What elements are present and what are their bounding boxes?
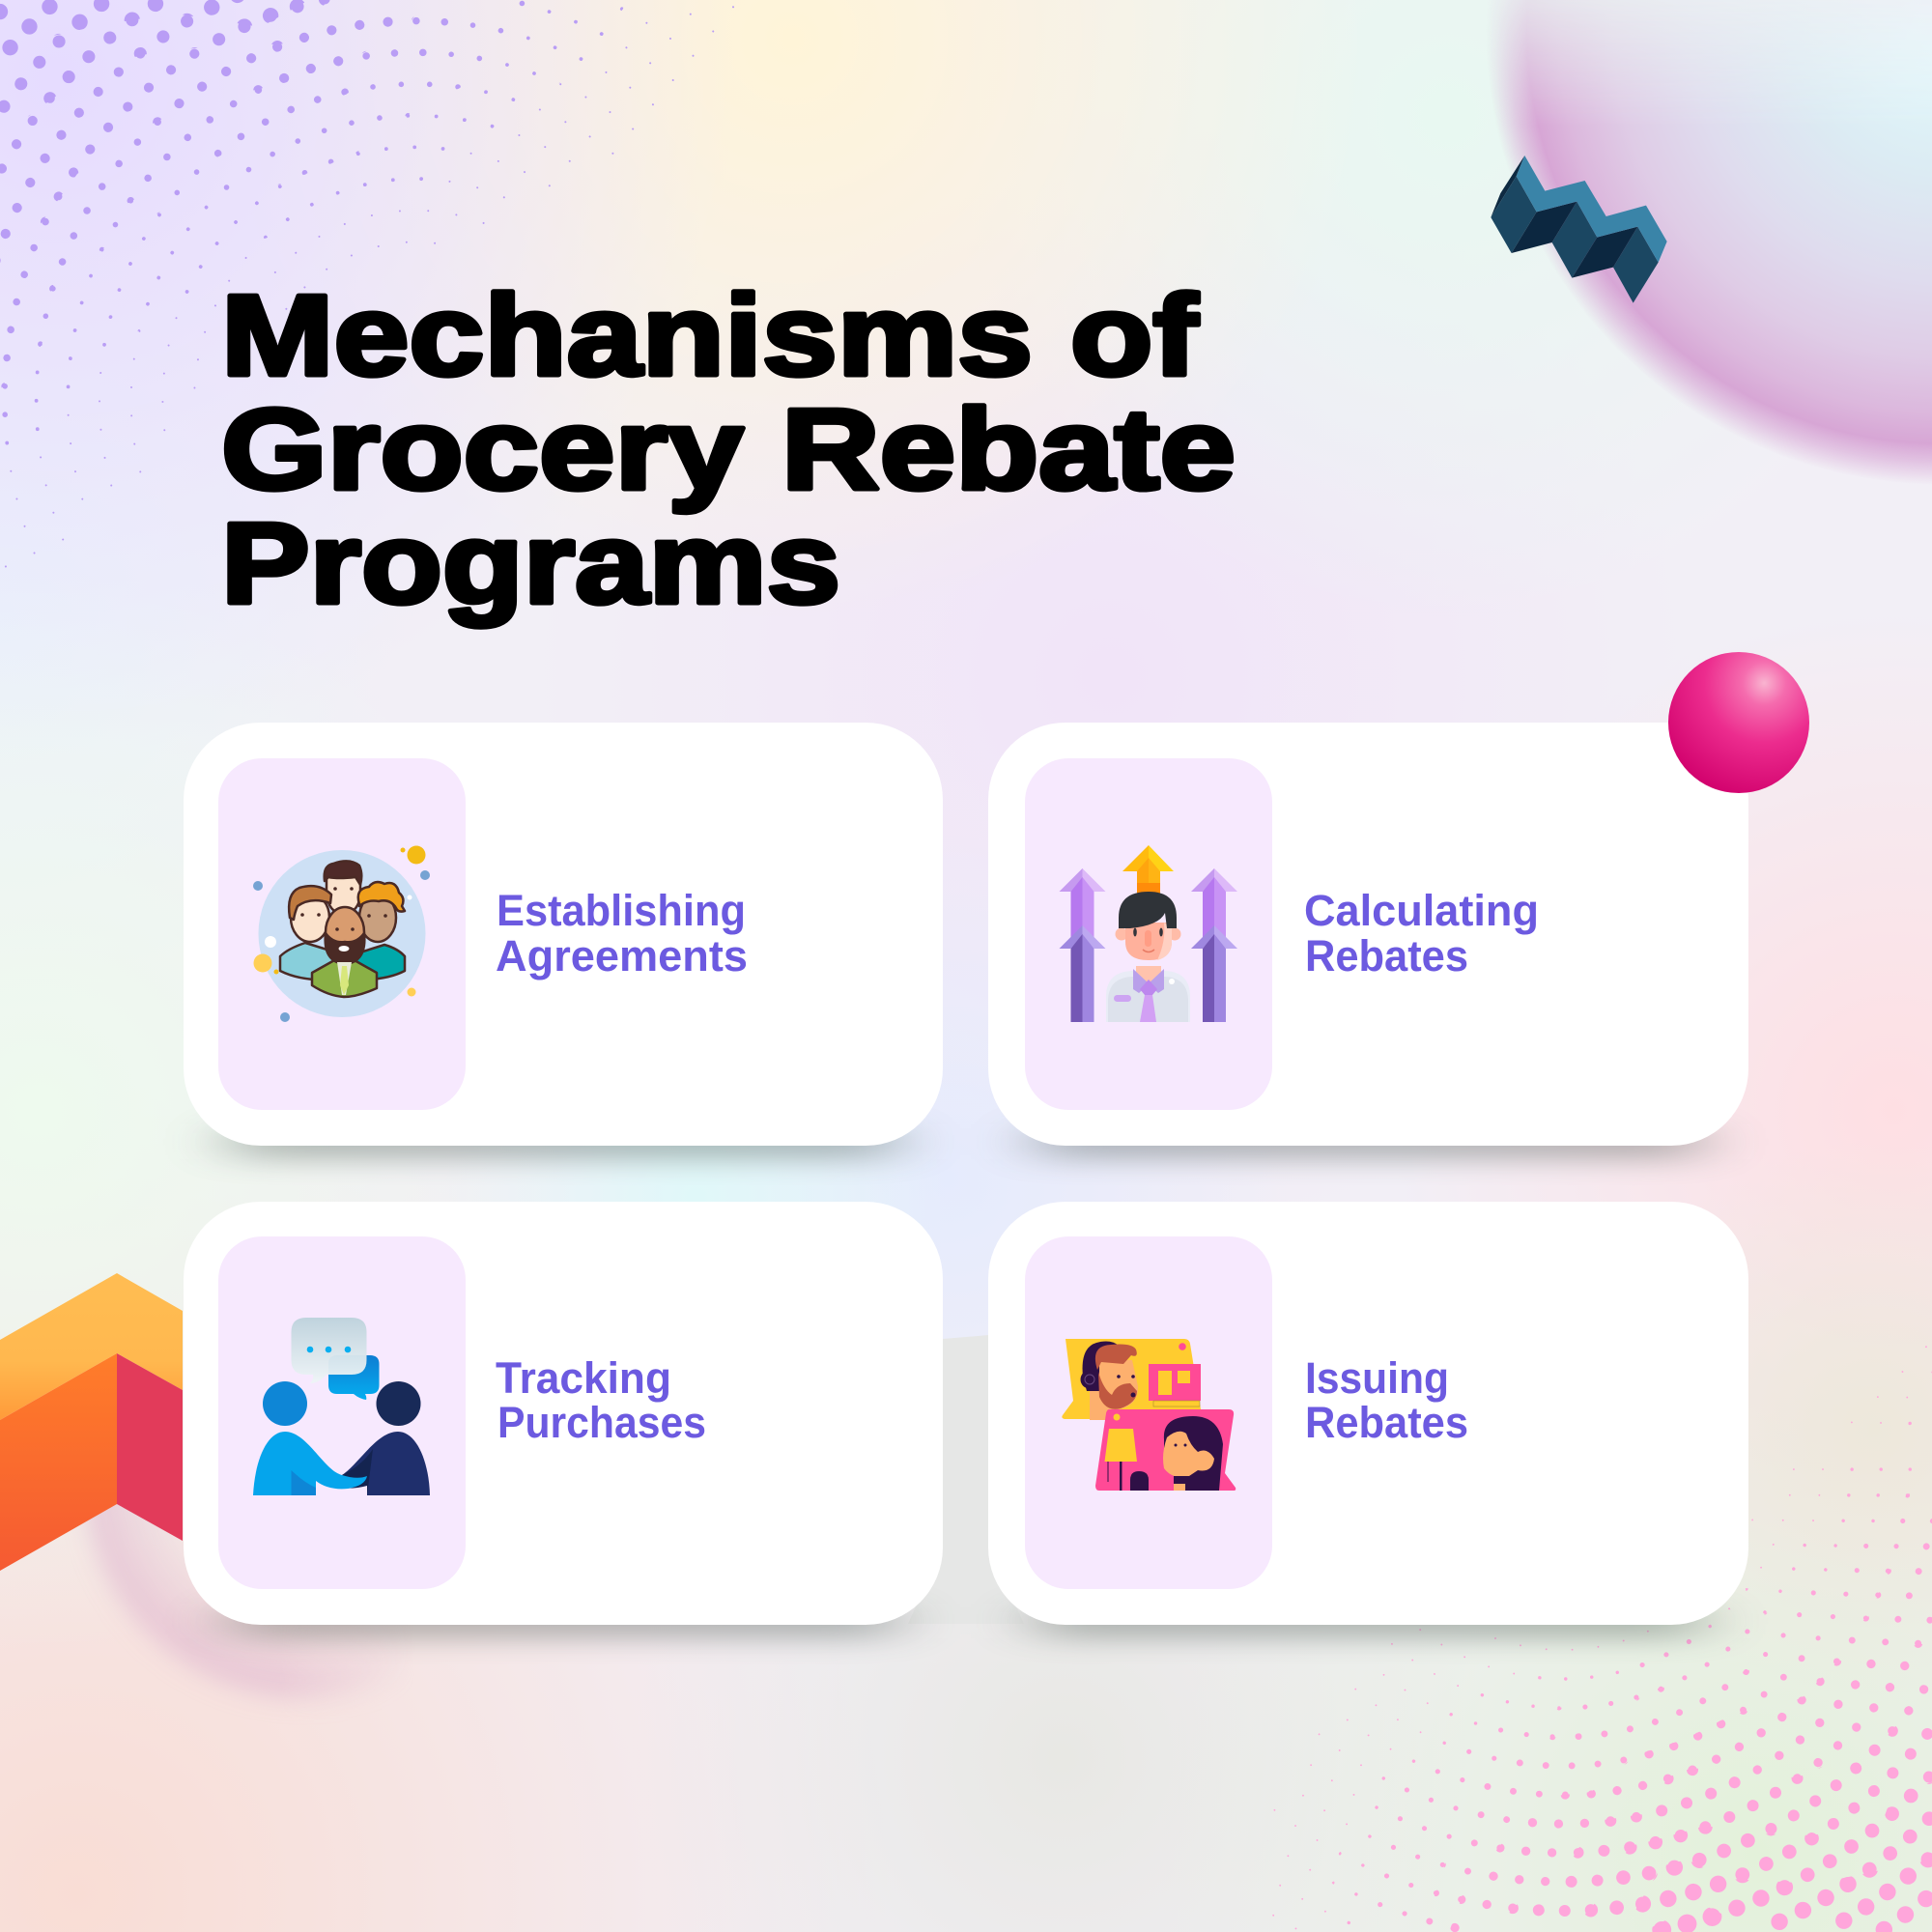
halftone dots: top left — [0, 0, 734, 568]
label: Establishing — [497, 886, 746, 935]
icon: group of people — [253, 846, 430, 1022]
icon panel — [218, 758, 466, 1110]
label: Issuing — [1305, 1353, 1449, 1403]
decoration: blue 3D zigzag — [1491, 156, 1667, 303]
title: Mechanisms of — [221, 271, 1198, 400]
label: Agreements — [496, 931, 748, 980]
card shadows — [232, 1124, 1699, 1638]
label: Rebates — [1305, 1398, 1468, 1447]
title: Grocery Rebate — [221, 385, 1236, 514]
label: Tracking — [496, 1353, 671, 1403]
card: Issuing Rebates — [988, 1202, 1748, 1625]
icon: man with rising arrows — [1059, 845, 1237, 1022]
blurred pink blob: top right — [1492, 0, 1932, 481]
label — [496, 886, 748, 980]
icon panel — [1025, 1236, 1272, 1589]
icon panel — [1025, 758, 1272, 1110]
card: Tracking Purchases — [184, 1202, 943, 1625]
label: Purchases — [497, 1398, 706, 1447]
label — [496, 1353, 706, 1447]
icon panel — [218, 1236, 466, 1589]
label — [1305, 1353, 1468, 1447]
card: Calculating Rebates — [988, 723, 1748, 1146]
background shift behind the lower cards — [908, 1335, 1024, 1624]
blurred pink crescent: bottom left — [83, 1504, 375, 1704]
title — [221, 271, 1236, 628]
label: Rebates — [1305, 931, 1468, 980]
title: Programs — [221, 499, 840, 628]
decoration: pink sphere — [1668, 652, 1809, 793]
decoration: orange chevron — [0, 1273, 183, 1571]
label: Calculating — [1304, 886, 1539, 935]
label — [1304, 886, 1539, 980]
icon: two video call screens — [1062, 1339, 1236, 1491]
icon: two people shaking hands with speech bubbles — [253, 1318, 430, 1495]
halftone dots: bottom right — [1267, 1346, 1932, 1932]
card: Establishing Agreements — [184, 723, 943, 1146]
